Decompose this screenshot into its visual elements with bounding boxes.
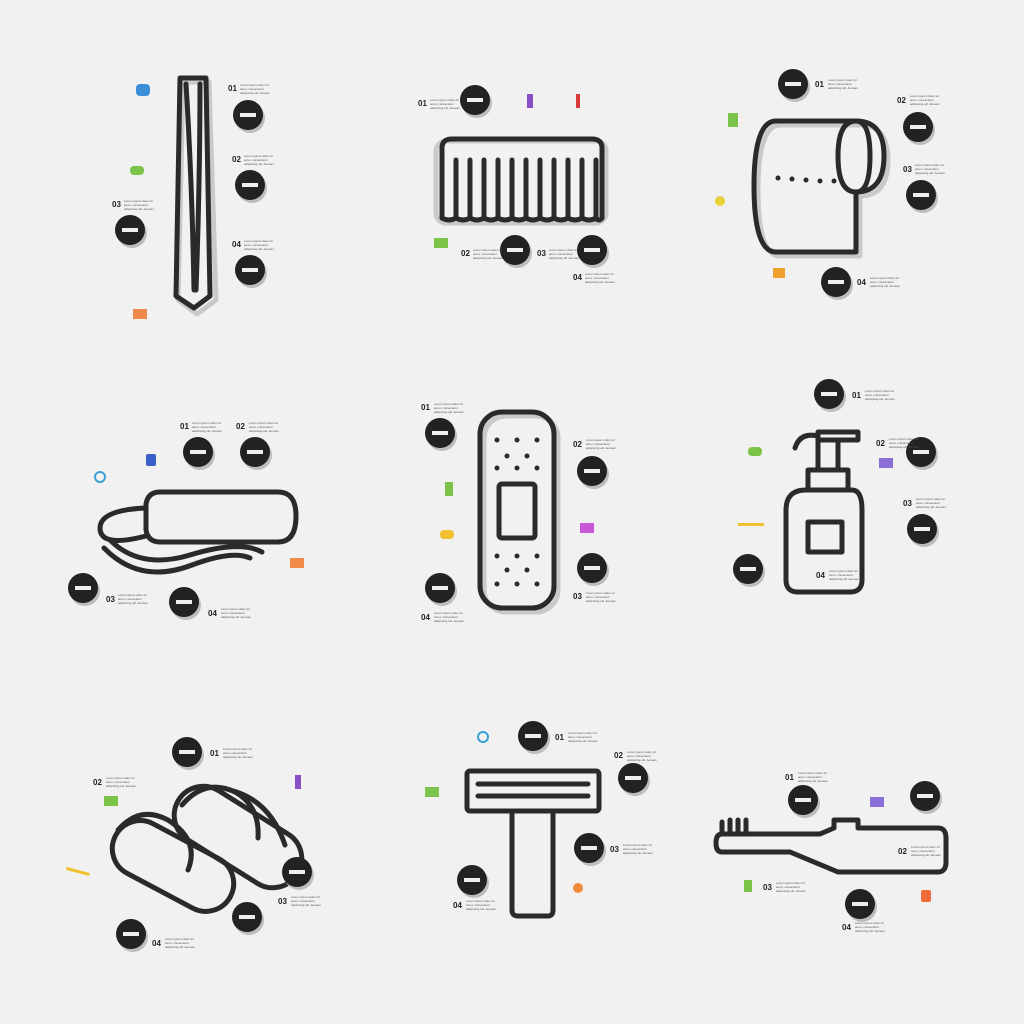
- small coloured icons: [715, 113, 785, 278]
- icon: razor: [467, 771, 599, 916]
- callouts: 01: [228, 84, 237, 93]
- callouts: [763, 771, 942, 933]
- panel: razor: [425, 721, 657, 916]
- callouts: 04: [816, 571, 825, 580]
- icon: toilet roll: [754, 121, 888, 256]
- callouts: [733, 379, 946, 587]
- callouts: 04: [208, 609, 217, 618]
- panel: slippers: [66, 737, 321, 952]
- small coloured icons: [744, 797, 931, 902]
- callouts: 03: [278, 897, 287, 906]
- small coloured icons: [738, 447, 893, 526]
- callouts: [112, 83, 274, 288]
- panel: bandage: [421, 402, 616, 623]
- callouts: 01: [418, 99, 427, 108]
- callouts: 04: [421, 613, 430, 622]
- callouts: 04: [232, 240, 241, 249]
- panel: tampon: [68, 421, 304, 620]
- callouts: 03: [610, 845, 619, 854]
- callouts: 03: [112, 200, 121, 209]
- icon: toothbrush: [716, 820, 946, 872]
- small coloured icons: [95, 454, 304, 568]
- callouts: 01: [180, 422, 189, 431]
- callouts: [421, 402, 616, 623]
- callouts: 02: [236, 422, 245, 431]
- icon: soap dispenser: [786, 432, 862, 592]
- callouts: [778, 69, 945, 300]
- callouts: 04: [842, 923, 851, 932]
- callouts: 03: [903, 165, 912, 174]
- callouts: 02: [897, 96, 906, 105]
- small coloured icons: [425, 732, 583, 893]
- panel: electric toothbrush: [716, 771, 946, 933]
- panel: soap dispenser: [733, 379, 946, 592]
- callouts: [418, 85, 615, 284]
- callouts: 02: [573, 440, 582, 449]
- callouts: 03: [573, 592, 582, 601]
- callouts: 04: [152, 939, 161, 948]
- small coloured icons: [66, 775, 301, 876]
- callouts: 01: [210, 749, 219, 758]
- small coloured icons: [434, 94, 580, 248]
- callouts: [68, 421, 279, 620]
- callouts: 03: [903, 499, 912, 508]
- callouts: 02: [232, 155, 241, 164]
- callouts: 02: [898, 847, 907, 856]
- icon: comb: [436, 139, 606, 223]
- callouts: 02: [93, 778, 102, 787]
- icon: bandage: [480, 412, 558, 612]
- callouts: 02: [461, 249, 470, 258]
- callouts: 01: [852, 391, 861, 400]
- callouts: [93, 737, 321, 952]
- callouts: 04: [453, 901, 462, 910]
- callouts: 01: [815, 80, 824, 89]
- icon: tampon: [100, 492, 296, 572]
- panel: tweezers: [112, 78, 274, 319]
- icon: slippers: [102, 775, 313, 921]
- panel: toilet roll: [715, 69, 945, 300]
- callouts: 02: [614, 751, 623, 760]
- small coloured icons: [130, 84, 150, 319]
- icon: tweezers: [176, 78, 216, 314]
- callouts: 03: [763, 883, 772, 892]
- callouts: 03: [537, 249, 546, 258]
- panel: comb: [418, 85, 615, 284]
- callouts: 01: [785, 773, 794, 782]
- small coloured icons: [440, 482, 594, 539]
- callouts: 01: [421, 403, 430, 412]
- callouts: [453, 721, 657, 911]
- callouts: 02: [876, 439, 885, 448]
- callouts: 03: [106, 595, 115, 604]
- callouts: 01: [555, 733, 564, 742]
- callouts: 04: [857, 278, 866, 287]
- callouts: 04: [573, 273, 582, 282]
